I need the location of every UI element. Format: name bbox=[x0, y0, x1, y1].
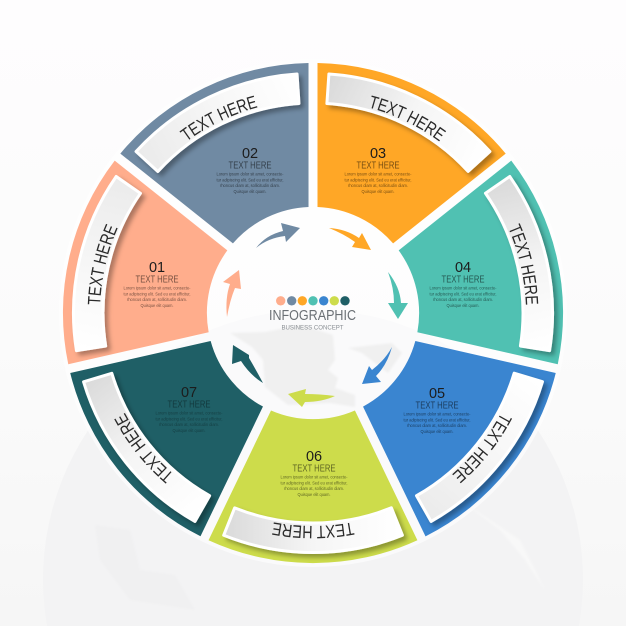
wedge 03 bbox=[318, 63, 506, 243]
label band 05 bbox=[412, 358, 543, 539]
label band 06 bbox=[215, 447, 404, 605]
text block 04: tur adipiscing elit. Sed eu erat efficitur, bbox=[430, 291, 496, 296]
arrow: 03 orange bbox=[329, 228, 371, 250]
band text 04: TEXT HERE bbox=[510, 223, 538, 305]
label band 04 bbox=[432, 175, 610, 363]
text block 02: Lorem ipsum dolor sit amet, consecte- bbox=[216, 172, 284, 176]
panel: segment 05 bbox=[363, 341, 556, 536]
text block 07: 07 bbox=[181, 385, 197, 401]
text block 06: 06 bbox=[306, 449, 322, 465]
text block 05: 05 bbox=[429, 386, 445, 402]
text block 06 bbox=[280, 449, 348, 497]
arrow: 05 blue bbox=[362, 347, 392, 384]
text block 04: 04 bbox=[455, 260, 471, 276]
text block 01: Quisque elit quam. bbox=[140, 303, 174, 308]
arrow: 01 peach bbox=[223, 270, 241, 317]
text block 07: Lorem ipsum dolor sit amet, consecte- bbox=[156, 410, 223, 416]
label band 02 bbox=[135, 26, 313, 214]
text block 01: tur adipiscing elit. Sed eu erat efficitur, bbox=[124, 291, 190, 296]
text block 03 bbox=[344, 146, 412, 194]
band text 01: TEXT HERE bbox=[88, 224, 118, 304]
text block 05: rhoncus diam at, sollicitudin diam. bbox=[407, 423, 467, 428]
wedge 01 bbox=[26, 141, 244, 364]
center title: INFOGRAPHIC bbox=[269, 308, 356, 324]
text block 03: rhoncus diam at, sollicitudin diam. bbox=[348, 183, 408, 188]
band text 03: TEXT HERE bbox=[371, 96, 446, 142]
arrow: 06 green bbox=[288, 389, 335, 407]
center subtitle: BUSINESS CONCEPT bbox=[282, 324, 344, 332]
text block 02: 02 bbox=[242, 146, 258, 162]
wedge 02 bbox=[120, 6, 379, 266]
wedge 06 bbox=[170, 378, 417, 622]
text block 02: TEXT HERE bbox=[228, 160, 272, 172]
arrow: 07 dark teal bbox=[232, 345, 263, 383]
text block 03: Quisque elit quam. bbox=[362, 189, 394, 194]
center logo bbox=[269, 296, 356, 332]
text block 06: Quisque elit quam. bbox=[298, 492, 330, 497]
text block 05 bbox=[404, 386, 471, 434]
text block 05: Lorem ipsum dolor sit amet, consecte- bbox=[404, 412, 471, 416]
text block 02: tur adipiscing elit. Sed eu erat efficitur, bbox=[216, 177, 284, 182]
panel: segment 01 bbox=[62, 160, 228, 364]
text block 04: TEXT HERE bbox=[442, 274, 485, 286]
band text 07: TEXT HERE bbox=[114, 413, 172, 484]
text block 04: Quisque elit quam. bbox=[446, 303, 480, 308]
text block 01 bbox=[124, 260, 191, 308]
text block 07: TEXT HERE bbox=[168, 400, 211, 410]
wedge 04 bbox=[370, 161, 626, 420]
text block 03: tur adipiscing elit. Sed eu erat efficitur, bbox=[344, 177, 412, 182]
text block 04: rhoncus diam at, sollicitudin diam. bbox=[433, 297, 493, 302]
text block 07: rhoncus diam at, sollicitudin diam. bbox=[159, 422, 219, 427]
text block 07 bbox=[156, 385, 223, 433]
text block 07: tur adipiscing elit. Sed eu erat efficitur, bbox=[156, 416, 222, 421]
label band 01 bbox=[41, 172, 172, 353]
panel: segment 04 bbox=[398, 160, 564, 364]
band text 02: TEXT HERE bbox=[180, 96, 258, 140]
text block 03: Lorem ipsum dolor sit amet, consecte- bbox=[344, 172, 412, 176]
panel: segment 06 bbox=[208, 410, 418, 564]
panel: segment 02 bbox=[120, 63, 308, 244]
arrow: 02 gray bbox=[256, 223, 300, 248]
text block 01: TEXT HERE bbox=[136, 274, 179, 286]
arrow: 04 teal bbox=[388, 272, 408, 319]
globe backdrop bbox=[43, 59, 583, 626]
text block 06: rhoncus diam at, sollicitudin diam. bbox=[284, 486, 344, 491]
label band 03 bbox=[327, 74, 490, 171]
text block 01: Lorem ipsum dolor sit amet, consecte- bbox=[124, 286, 191, 290]
wedge 07 bbox=[31, 292, 279, 536]
text block 04: Lorem ipsum dolor sit amet, consecte- bbox=[430, 286, 497, 290]
text block 03: 03 bbox=[370, 146, 386, 162]
text block 02 bbox=[216, 146, 284, 194]
text block 05: TEXT HERE bbox=[416, 400, 459, 412]
text block 02: rhoncus diam at, sollicitudin diam. bbox=[220, 183, 280, 188]
band text 05: TEXT HERE bbox=[452, 416, 512, 484]
text block 01: 01 bbox=[149, 260, 165, 276]
band text 06: TEXT HERE bbox=[272, 522, 354, 538]
text block 05: Quisque elit quam. bbox=[420, 429, 454, 434]
text block 02: Quisque elit quam. bbox=[234, 189, 266, 194]
text block 06: tur adipiscing elit. Sed eu erat efficitur, bbox=[280, 480, 348, 485]
panel: segment 07 bbox=[70, 341, 263, 536]
text block 07: Quisque elit quam. bbox=[172, 428, 206, 433]
text block 06: Lorem ipsum dolor sit amet, consecte- bbox=[280, 474, 348, 480]
text block 04 bbox=[430, 260, 497, 308]
label band 07 bbox=[50, 364, 239, 522]
text block 03: TEXT HERE bbox=[356, 160, 400, 172]
text block 05: tur adipiscing elit. Sed eu erat efficitur, bbox=[404, 417, 470, 422]
text block 01: rhoncus diam at, sollicitudin diam. bbox=[127, 297, 187, 302]
wedge 05 bbox=[338, 333, 556, 557]
panel: segment 03 bbox=[318, 63, 506, 244]
text block 06: TEXT HERE bbox=[292, 464, 336, 474]
color dots bbox=[276, 296, 350, 305]
